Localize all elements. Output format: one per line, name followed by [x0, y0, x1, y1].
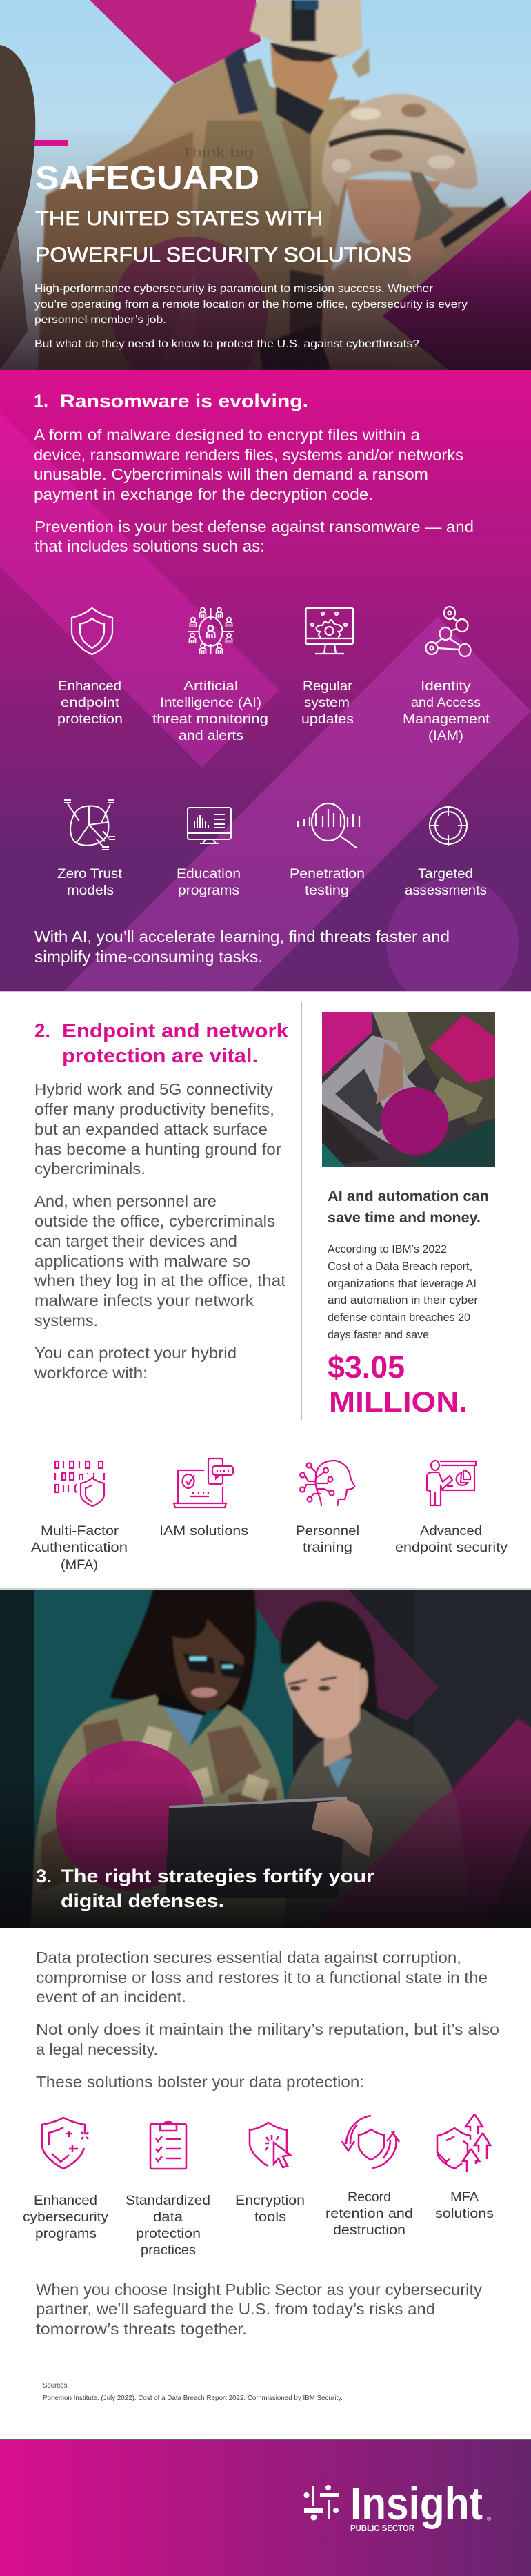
callout: AI and automation stat: MILLION. [329, 1385, 468, 1418]
title: SAFEGUARD [35, 160, 259, 197]
logo: Insight Public Sector: PUBLIC SECTOR [350, 2523, 415, 2533]
footer band [0, 2439, 531, 2576]
icon: multi-factor binary shield [55, 1461, 104, 1506]
callout: AI and automation stat: Cost of a Data Breach report, [328, 1260, 472, 1273]
labels: icon row 2: Penetration [290, 867, 365, 881]
icon: zero trust pie chart [64, 800, 115, 850]
labels: section 3 icons: Standardized [126, 2194, 210, 2208]
panel: section 3 photo with two service members [0, 1590, 531, 1928]
section 2 body text: And, when personnel are [34, 1192, 217, 1210]
callout: AI and automation stat: and automation in their cyber [328, 1294, 479, 1307]
title: THE UNITED STATES WITH [35, 207, 323, 230]
callout: AI and automation stat: According to IBM’s 2022 [328, 1243, 447, 1256]
labels: icon row 1: Intelligence (AI) [160, 696, 261, 710]
accent bar [34, 140, 68, 146]
labels: icon row 2 [57, 867, 487, 898]
section 2 body text [34, 1080, 286, 1382]
section 3 body text: Data protection secures essential data against corruption, [36, 1949, 461, 1967]
section 2 heading: protection are vital. [62, 1045, 258, 1067]
logo: Insight Public Sector [303, 2478, 491, 2533]
title [35, 160, 412, 266]
logo: Insight Public Sector: ® [487, 2516, 491, 2522]
labels: icon row 1: Management [403, 712, 490, 727]
labels: section 2 icons: (MFA) [61, 1558, 98, 1572]
sources: Ponemon Institute. (July 2022). Cost of a Data Breach Report 2022. Commissioned by IBM Security. [43, 2394, 343, 2402]
labels: section 2 icons: training [303, 1541, 352, 1555]
callout: AI and automation stat: organizations that leverage AI [328, 1278, 477, 1290]
icon: personnel training head [300, 1461, 354, 1506]
labels: section 3 icons [23, 2190, 494, 2258]
labels: section 3 icons: practices [141, 2243, 196, 2258]
sources [43, 2382, 343, 2402]
section 1 body text: A form of malware designed to encrypt files within a [34, 426, 420, 444]
closing text [36, 2281, 483, 2338]
icon: IAM laptop and phone [174, 1458, 233, 1507]
closing text: tomorrow’s threats together. [36, 2320, 247, 2338]
section 2 body text: but an expanded attack surface [34, 1120, 268, 1138]
labels: icon row 1: protection [57, 712, 123, 727]
section 1 body text: payment in exchange for the decryption code. [34, 485, 373, 503]
faint ghost text: Think big [181, 146, 254, 161]
section 2 body text: outside the office, cybercriminals [34, 1212, 275, 1230]
section 1 body text: Prevention is your best defense against ransomware — and [34, 518, 474, 536]
section 2 heading: Endpoint and network [62, 1020, 289, 1042]
labels: icon row 1: threat monitoring [152, 712, 268, 727]
labels: section 2 icons: Multi-Factor [41, 1524, 119, 1539]
closing text: partner, we’ll safeguard the U.S. from today’s risks and [36, 2300, 435, 2318]
labels: section 2 icons: Authentication [31, 1541, 128, 1555]
labels: icon row 1: updates [301, 712, 354, 727]
labels: icon row 2: testing [305, 884, 349, 898]
icon: identity network nodes [426, 607, 470, 656]
labels: section 2 icons [31, 1524, 508, 1572]
labels: icon row 2: Education [177, 867, 241, 881]
labels: icon row 2: models [67, 884, 114, 898]
callout: AI and automation stat: $3.05 [328, 1349, 405, 1385]
labels: section 2 icons: endpoint security [395, 1541, 508, 1555]
callout: AI and automation stat: save time and money. [328, 1210, 481, 1226]
closing text: When you choose Insight Public Sector as your cybersecurity [36, 2281, 483, 2299]
labels: section 3 icons: destruction [333, 2223, 405, 2238]
labels: section 3 icons: MFA [450, 2190, 479, 2205]
labels: icon row 2: Targeted [418, 867, 473, 881]
icon: target [429, 806, 468, 846]
hero intro text: High-performance cybersecurity is paramount to mission success. Whether [34, 283, 434, 295]
labels: icon row 1: system [304, 696, 350, 710]
hero: photo background with two soldiers [0, 0, 531, 393]
labels: section 3 icons: programs [35, 2227, 97, 2241]
callout: AI and automation stat: AI and automation can [328, 1189, 489, 1204]
section 3 heading: The right strategies fortify your [61, 1866, 375, 1886]
panel: section 1 ransomware [0, 371, 531, 1010]
callout: AI and automation stat: defense contain breaches 20 [328, 1311, 470, 1324]
labels: icon row 1 [57, 679, 490, 743]
labels: icon row 2: Zero Trust [57, 867, 123, 881]
hero intro text: you’re operating from a remote location or the home office, cybersecurity is every [34, 299, 468, 311]
section 3 body text: These solutions bolster your data protection: [36, 2073, 364, 2091]
section 1 body text [34, 426, 474, 555]
logo: Insight Public Sector: Insight [350, 2478, 483, 2530]
labels: section 2 icons: Advanced [420, 1524, 482, 1539]
icon: record retention cycle shield [342, 2116, 399, 2168]
section 3 body text: event of an incident. [36, 1988, 186, 2006]
section 2 body text: Hybrid work and 5G connectivity [34, 1080, 274, 1098]
icon: penetration testing magnifier [298, 803, 359, 848]
section 2 heading [34, 1020, 289, 1067]
labels: icon row 2: assessments [405, 884, 487, 898]
section 1 body text: unusable. Cybercriminals will then demand a ransom [34, 465, 428, 483]
section 1 closing text [34, 928, 450, 966]
sources: Sources: [43, 2382, 69, 2390]
labels: section 3 icons: data [153, 2210, 183, 2225]
section 1 heading: Ransomware is evolving. [60, 391, 308, 411]
icon: cybersecurity shield [42, 2118, 88, 2169]
section 2 body text: cybercriminals. [34, 1160, 146, 1178]
labels: icon row 2: programs [178, 884, 239, 898]
labels: icon row 1: and Access [411, 696, 481, 710]
labels: icon row 1: endpoint [61, 696, 120, 710]
panel: section 3 data protection [0, 1928, 531, 2439]
icon: shield [72, 608, 112, 654]
icon: MFA shield with arrows [437, 2114, 490, 2172]
section 1 body text: that includes solutions such as: [34, 537, 265, 555]
photo: hands on laptop [322, 1012, 495, 1167]
labels: section 3 icons: tools [254, 2210, 286, 2225]
callout: AI and automation stat: days faster and save [328, 1329, 429, 1341]
section 3 body text: Not only does it maintain the military’s reputation, but it’s also [36, 2020, 499, 2038]
labels: section 3 icons: Enhanced [34, 2194, 97, 2208]
labels: section 2 icons: IAM solutions [159, 1524, 248, 1539]
section 1 closing text: simplify time-consuming tasks. [34, 948, 263, 966]
labels: section 3 icons: Record [348, 2190, 391, 2205]
icon: encryption shield with cursor [250, 2123, 290, 2167]
section 2 body text: applications with malware so [34, 1252, 250, 1270]
labels: icon row 1: and alerts [179, 729, 243, 743]
hero intro text: But what do they need to know to protect the U.S. against cyberthreats? [34, 338, 419, 350]
section 2 body text: can target their devices and [34, 1232, 237, 1250]
labels: section 3 icons: solutions [435, 2207, 494, 2221]
section 2 body text: You can protect your hybrid [34, 1344, 237, 1362]
icon: monitor with gear [306, 608, 353, 654]
labels: icon row 1: Identity [421, 679, 472, 694]
labels: section 3 icons: protection [136, 2227, 201, 2241]
section 3 body text: a legal necessity. [36, 2040, 158, 2058]
section 2 body text: when they log in at the office, that [34, 1271, 286, 1289]
labels: section 3 icons: retention and [325, 2207, 413, 2221]
section 3 heading: 3. [36, 1866, 52, 1886]
section 3 body text [36, 1949, 499, 2091]
section 2 heading: 2. [34, 1020, 50, 1042]
icon: AI network of people [188, 607, 234, 654]
labels: icon row 1: Enhanced [58, 679, 121, 694]
section 2 body text: has become a hunting ground for [34, 1140, 281, 1158]
icon: education monitor [188, 808, 231, 843]
section 1 heading: 1. [34, 391, 48, 411]
section 2 body text: offer many productivity benefits, [34, 1100, 274, 1118]
section 3 heading [36, 1866, 375, 1911]
hero intro text [34, 283, 468, 350]
hero intro text: personnel member’s job. [34, 314, 166, 326]
section 3 body text: compromise or loss and restores it to a functional state in the [36, 1969, 488, 1987]
title: POWERFUL SECURITY SOLUTIONS [35, 244, 412, 266]
labels: section 3 icons: Encryption [235, 2194, 305, 2208]
labels: section 3 icons: cybersecurity [23, 2210, 109, 2225]
section 2 body text: workforce with: [34, 1364, 148, 1382]
icon: advanced endpoint security presenter [427, 1461, 476, 1505]
section 2 body text: systems. [34, 1311, 98, 1329]
section 3 heading: digital defenses. [61, 1891, 224, 1911]
section 1 body text: device, ransomware renders files, systems and/or networks [34, 446, 463, 464]
panel: section 2 endpoint and network [31, 1002, 508, 1572]
labels: section 2 icons: Personnel [296, 1524, 359, 1539]
callout: AI and automation stat [328, 1189, 489, 1418]
labels: icon row 1: Regular [303, 679, 353, 694]
section 1 closing text: With AI, you’ll accelerate learning, find threats faster and [34, 928, 450, 946]
labels: icon row 1: (IAM) [428, 729, 463, 743]
section 2 body text: malware infects your network [34, 1291, 254, 1309]
icon: clipboard checklist [150, 2122, 186, 2169]
labels: icon row 1: Artificial [183, 679, 238, 694]
